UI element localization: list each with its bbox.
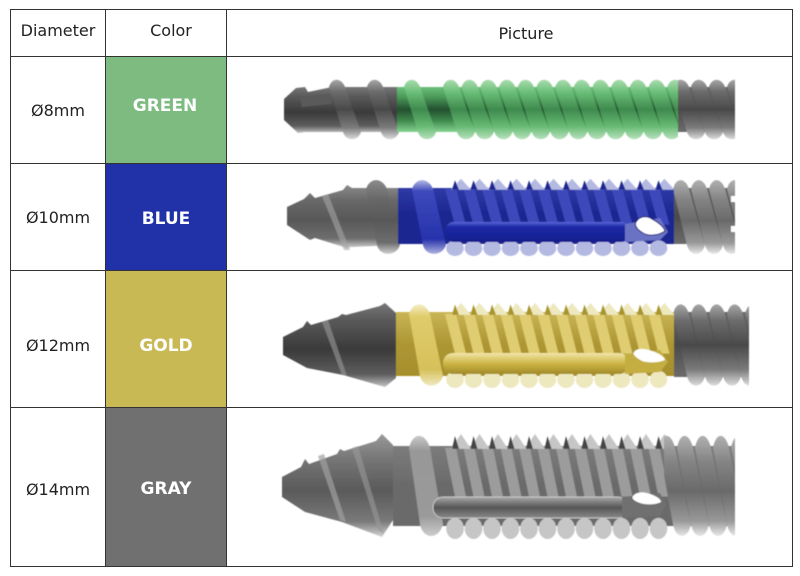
color cell: gray: GRAY bbox=[141, 479, 192, 499]
diameter labels bbox=[26, 101, 90, 499]
diameter labels: Ø10mm bbox=[26, 208, 90, 227]
header row bbox=[21, 21, 554, 43]
color cell: blue: BLUE bbox=[142, 209, 190, 229]
header row: Color bbox=[150, 21, 192, 40]
header row: Diameter bbox=[21, 21, 96, 40]
color cell: gray bbox=[106, 408, 226, 566]
picture: green screw 8mm bbox=[284, 80, 777, 139]
color cell: green: GREEN bbox=[133, 96, 197, 116]
picture: gray screw 14mm bbox=[282, 434, 763, 539]
diameter labels: Ø12mm bbox=[26, 336, 90, 355]
picture: gold screw 12mm bbox=[283, 303, 777, 388]
color cell: gold bbox=[106, 271, 226, 407]
header row: Picture bbox=[498, 24, 554, 43]
color cell: gold: GOLD bbox=[139, 336, 193, 356]
color cell: green bbox=[106, 57, 226, 163]
picture: blue screw 10mm bbox=[287, 179, 777, 256]
diameter labels: Ø8mm bbox=[31, 101, 85, 120]
diameter labels: Ø14mm bbox=[26, 480, 90, 499]
color cell: blue bbox=[106, 164, 226, 270]
